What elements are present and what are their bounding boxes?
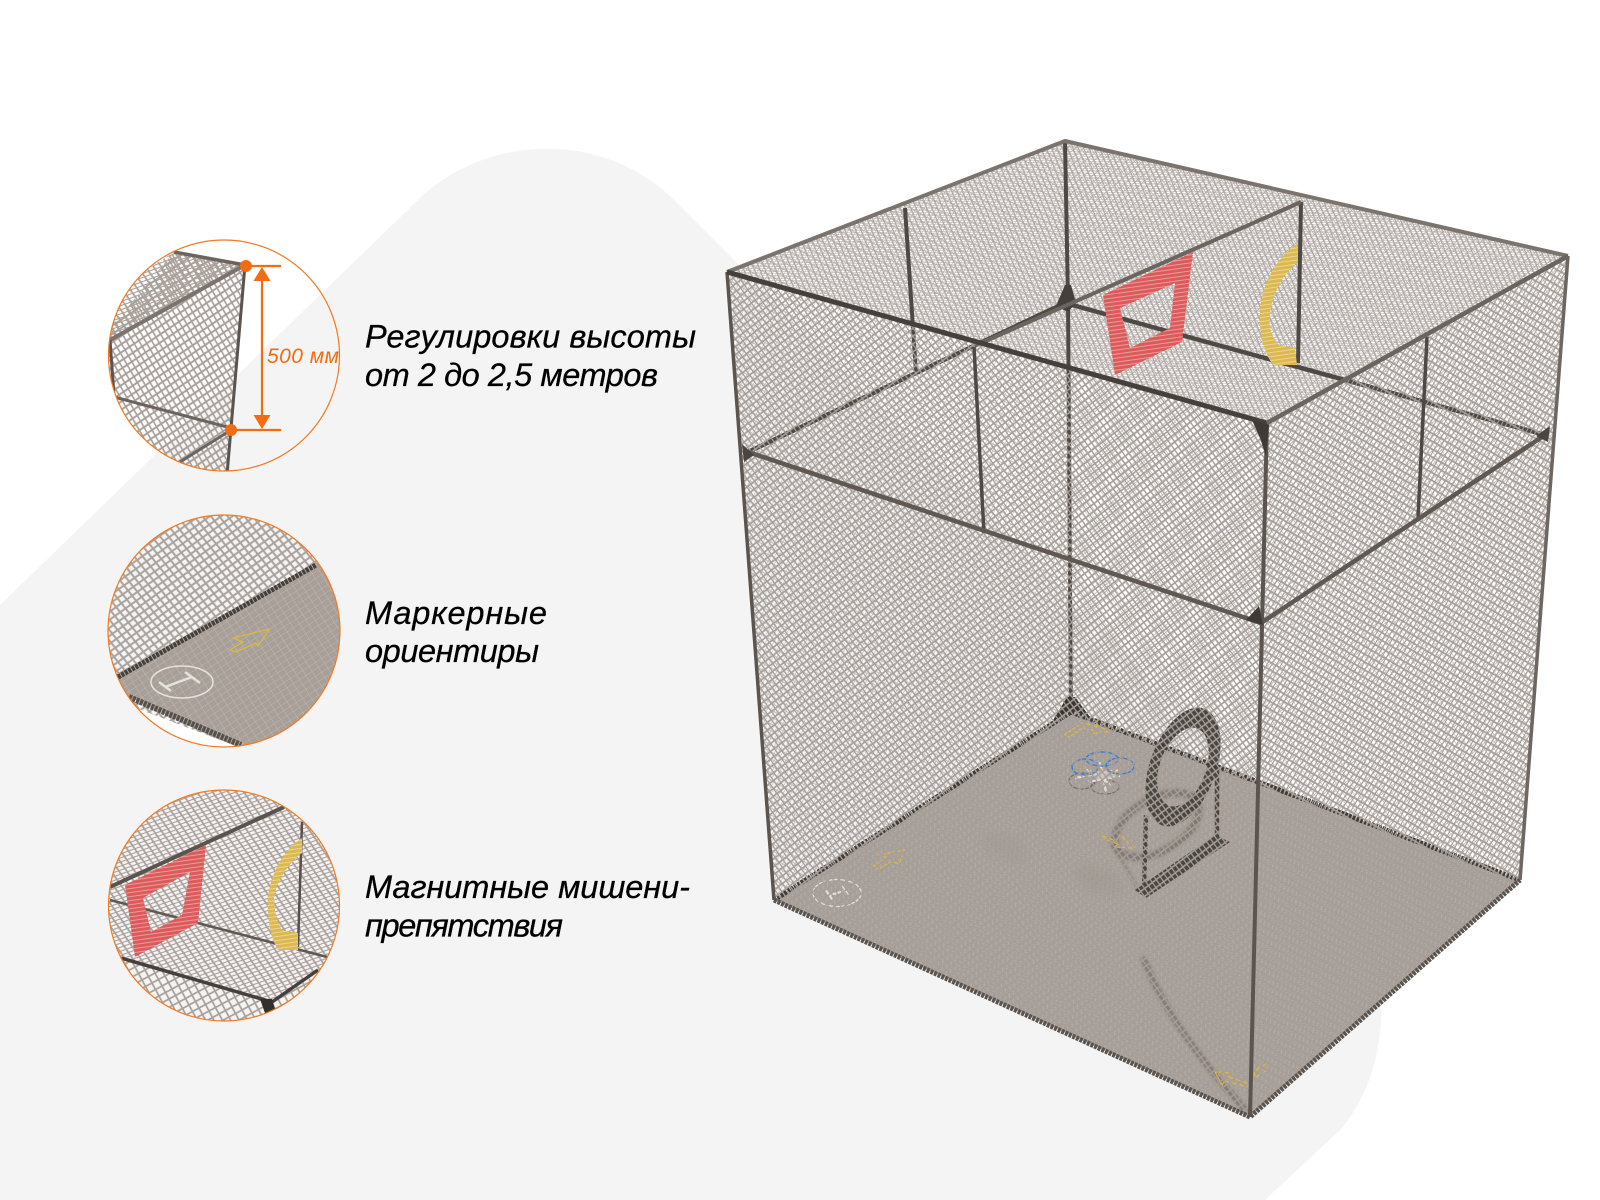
inset 1 border [108,240,340,471]
front frame [727,141,1568,1117]
inset 1 detail [100,252,245,480]
inset 2: floor markers [100,512,345,755]
height dimension: 500 мм [267,345,339,368]
inset 2 detail [108,516,340,746]
inset 3 border [108,790,340,1021]
inset 3: magnetic targets [108,789,340,1022]
front walls mesh [727,256,1568,1117]
caption 1: от 2 до 2,5 метров [365,357,658,393]
caption 3: Магнитные мишени- [365,869,690,905]
yellow direction arrows [874,723,1267,1087]
inset 3 detail [109,790,339,1020]
caption 1: Регулировки высоты [365,318,696,354]
ceiling mesh [727,141,1568,423]
back walls mesh [727,141,1568,900]
inset 2 border [108,515,340,747]
landing pad H marker [813,880,861,906]
caption 2: Маркерные [365,595,547,631]
flight cage illustration [727,141,1568,1117]
back frame [748,141,1545,900]
height dimension [225,260,339,436]
red magnetic target [1103,252,1193,375]
drone [1069,752,1134,794]
floor shadows [978,779,1247,1112]
ceiling divider [972,202,1301,347]
caption 3: препятствия [365,908,563,944]
cage floor [774,712,1520,1117]
inset 1: height adjustment [100,240,340,480]
background blob [0,149,1381,1200]
ring obstacle [1131,697,1235,898]
yellow magnetic target [1260,243,1298,365]
caption 2: ориентиры [365,633,539,669]
